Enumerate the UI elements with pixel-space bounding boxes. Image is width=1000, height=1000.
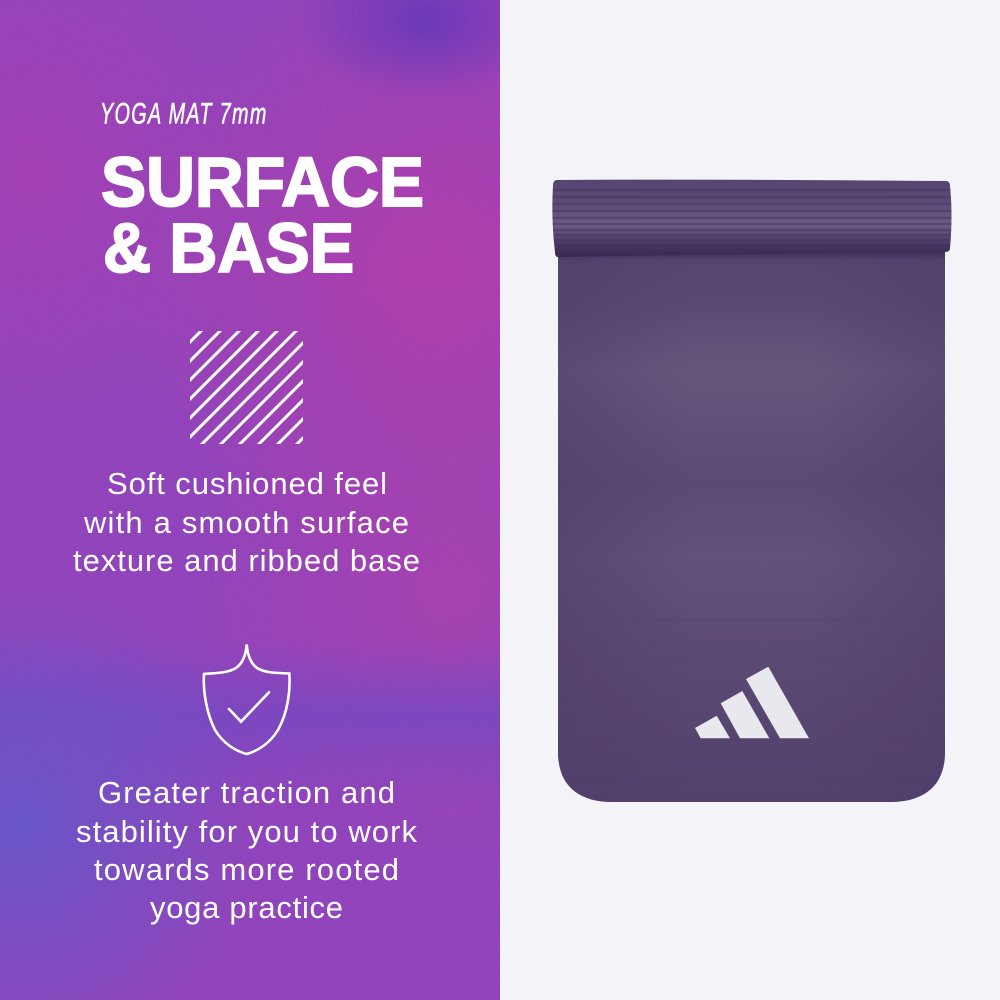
panel: purple gradient feature panel — [0, 0, 500, 1000]
icon: diagonal striped surface texture — [190, 331, 303, 444]
text block: greater traction and stability: yoga practice — [150, 890, 343, 925]
text block: soft cushioned feel: Soft cushioned feel — [107, 466, 387, 501]
text block: greater traction and stability: towards more rooted — [94, 852, 399, 887]
heading: surface and base: & BASE — [103, 209, 354, 287]
heading: surface and base: SURFACE — [101, 143, 424, 221]
text block: greater traction and stability — [76, 775, 418, 925]
icon: three-bar logo — [695, 667, 809, 738]
icon: shield with check mark — [204, 644, 290, 754]
mat body — [558, 250, 945, 802]
mat roll with ribbed base — [550, 178, 955, 260]
text block: greater traction and stability: Greater traction and — [98, 775, 395, 810]
heading: surface and base — [101, 143, 424, 287]
text block: soft cushioned feel — [73, 466, 420, 578]
text block: greater traction and stability: stability for you to work — [76, 814, 418, 849]
text block: soft cushioned feel: with a smooth surface — [83, 505, 409, 540]
product: rolled yoga mat — [550, 178, 955, 802]
eyebrow: product name: YOGA MAT 7mm — [100, 98, 266, 131]
text block: soft cushioned feel: texture and ribbed base — [73, 543, 420, 578]
